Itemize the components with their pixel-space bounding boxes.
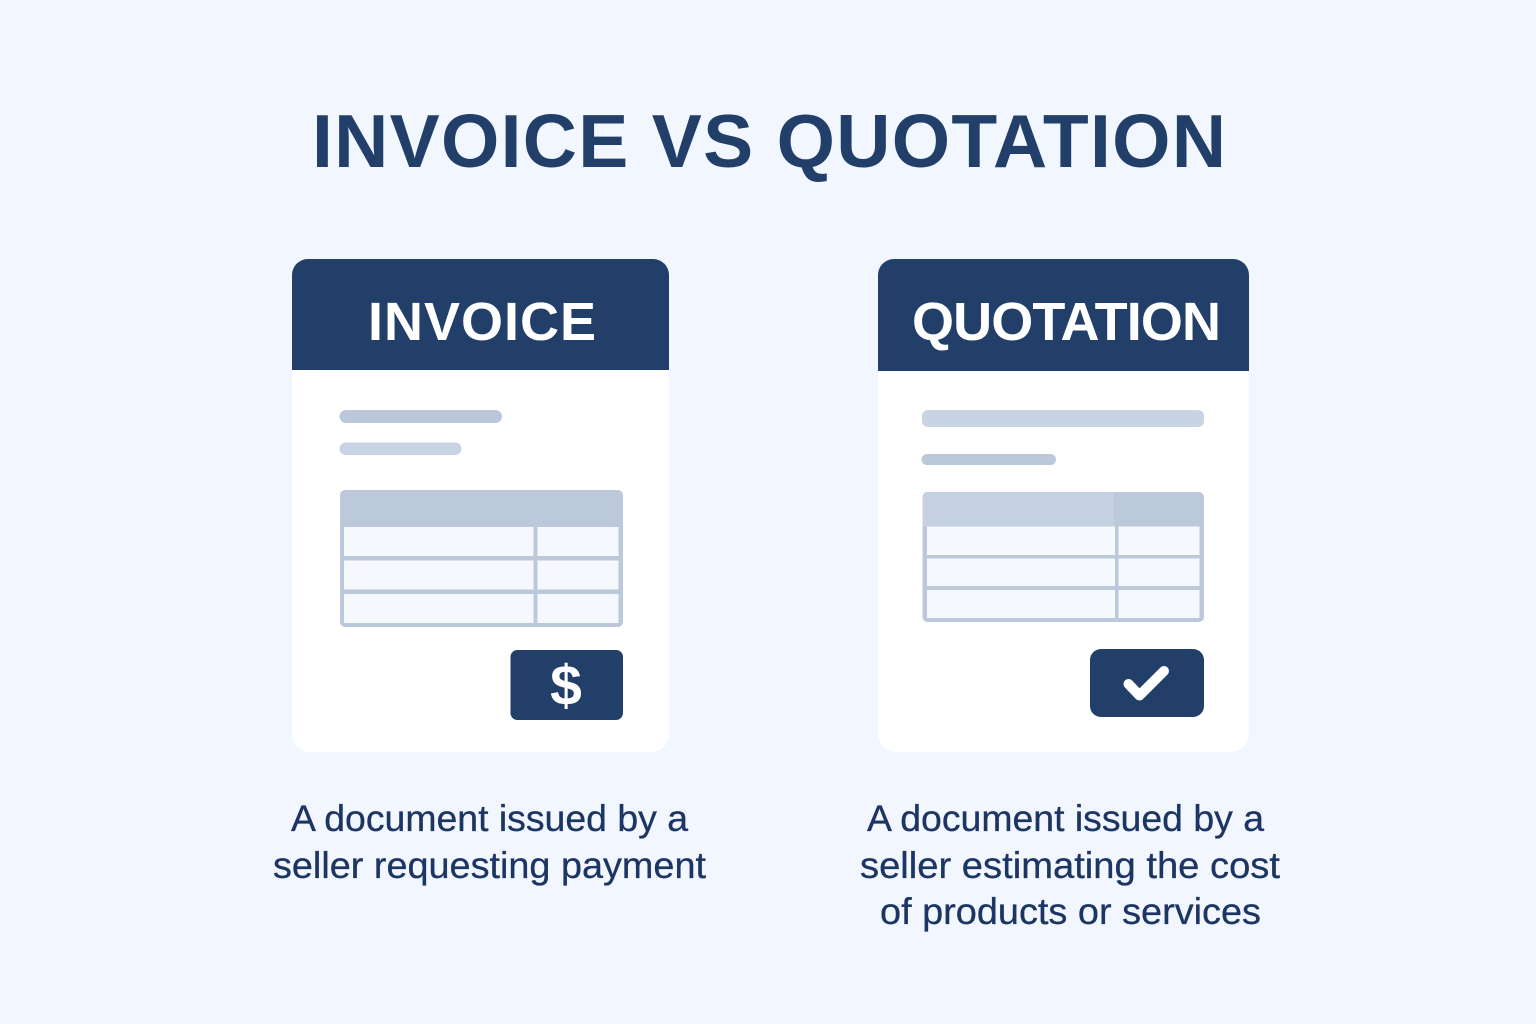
text block: invoice description: seller requesting payment bbox=[273, 845, 707, 886]
panel: invoice card bbox=[292, 259, 669, 752]
heading: quotation: QUOTATION bbox=[912, 292, 1221, 352]
text block: quotation description: seller estimating the cost bbox=[860, 845, 1281, 886]
table bbox=[922, 492, 1204, 622]
text block: quotation description: A document issued by a bbox=[867, 798, 1264, 839]
title: INVOICE VS QUOTATION bbox=[312, 99, 1226, 183]
text block: quotation description: of products or services bbox=[880, 891, 1261, 932]
table bbox=[340, 490, 623, 627]
placeholder line 1 bbox=[340, 410, 502, 423]
card header bbox=[878, 259, 1249, 371]
text block: quotation description bbox=[860, 798, 1281, 932]
text block: invoice description: A document issued by a bbox=[291, 798, 688, 839]
placeholder line 2 bbox=[340, 442, 462, 455]
icon: dollar badge bbox=[510, 650, 623, 720]
placeholder line 1 bbox=[922, 410, 1204, 427]
panel: quotation card bbox=[878, 259, 1249, 752]
heading: invoice: INVOICE bbox=[368, 292, 596, 352]
placeholder line 2 bbox=[922, 454, 1056, 465]
icon: dollar badge: $ bbox=[550, 654, 582, 718]
card body bbox=[878, 259, 1249, 752]
text block: invoice description bbox=[273, 798, 707, 886]
icon: check badge bbox=[1090, 649, 1204, 717]
card header bbox=[292, 259, 669, 370]
card body bbox=[292, 259, 669, 752]
